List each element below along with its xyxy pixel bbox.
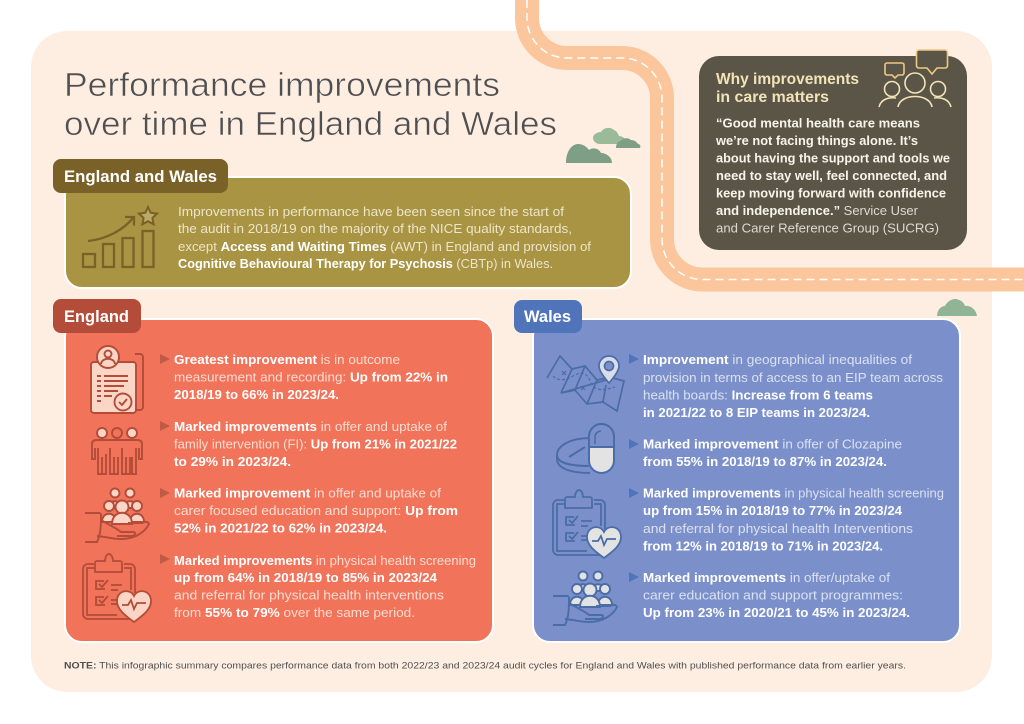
icon: map with pin bbox=[547, 356, 624, 411]
England text: outcome measurement: Greatest improvement is in outcome bbox=[174, 352, 400, 367]
England text: outcome measurement: measurement and recording: Up from 22% in bbox=[174, 370, 448, 384]
England text: carer education bbox=[174, 486, 458, 536]
tab heading: England and Wales: England and Wales bbox=[64, 167, 217, 186]
winding road bbox=[527, 0, 1024, 280]
tab heading: England bbox=[53, 299, 141, 333]
Wales text: clozapine: Marked improvement in offer of Clozapine bbox=[643, 436, 902, 452]
Wales text: physical health: and referral for physical health Interventions bbox=[643, 521, 914, 536]
Wales text: carer education: carer education and support programmes: bbox=[643, 588, 903, 602]
England text: family intervention bbox=[174, 419, 457, 469]
icon: clipboard with heart bbox=[553, 490, 621, 558]
England text: family intervention: Marked improvements in offer and uptake of bbox=[174, 419, 447, 434]
icon: hand holding people bbox=[553, 572, 617, 625]
panel: why improvements matter bbox=[699, 50, 967, 250]
England text: physical health: and referral for physical health interventions bbox=[174, 588, 445, 602]
Wales text: clozapine: from 55% in 2018/19 to 87% in 2023/24. bbox=[643, 454, 887, 469]
icon: clouds near title bbox=[566, 128, 640, 163]
title: Performance improvements bbox=[64, 66, 500, 103]
quote text bbox=[715, 116, 950, 236]
Wales bullet arrows bbox=[629, 354, 639, 582]
icon: cloud above Wales panel bbox=[937, 299, 977, 316]
England text: carer education: carer focused education and support: Up from bbox=[174, 503, 458, 518]
Wales text: geographical inequalities: health boards: Increase from 6 teams bbox=[643, 388, 873, 402]
Wales text: carer education: Up from 23% in 2020/21 to 45% in 2023/24. bbox=[643, 605, 910, 620]
England text: family intervention: to 29% in 2023/24. bbox=[174, 454, 291, 469]
Wales text: carer education bbox=[643, 570, 910, 620]
England text: carer education: Marked improvement in offer and uptake of bbox=[174, 486, 441, 500]
quote text: and independence.” Service User bbox=[716, 203, 919, 218]
heading: why improvements: in care matters bbox=[716, 89, 829, 106]
icon: clozapine tablet and capsule bbox=[557, 424, 614, 473]
icon: clipboard with heart bbox=[83, 554, 151, 622]
Wales text: physical health: Marked improvements in physical health screening bbox=[643, 486, 944, 500]
quote text: keep moving forward with confidence bbox=[716, 186, 946, 200]
Wales text: geographical inequalities: provision in terms of access to an EIP team across bbox=[643, 370, 944, 385]
Wales text: physical health: up from 15% in 2018/19 to 77% in 2023/24 bbox=[643, 503, 903, 518]
tab heading: England and Wales bbox=[53, 159, 228, 193]
summary text: Improvements in performance have been seen since the start of bbox=[178, 204, 564, 219]
summary text: the audit in 2018/19 on the majority of the NICE quality standards, bbox=[178, 221, 572, 236]
summary text: except Access and Waiting Times (AWT) in England and provision of bbox=[178, 239, 591, 254]
Wales text: carer education: Marked improvements in offer/uptake of bbox=[643, 570, 890, 585]
England text: physical health: from 55% to 79% over the same period. bbox=[174, 605, 415, 620]
summary text bbox=[178, 204, 591, 271]
England text: physical health: up from 64% in 2018/19 to 85% in 2023/24 bbox=[174, 570, 438, 585]
quote text: “Good mental health care means bbox=[716, 116, 920, 130]
title: over time in England and Wales bbox=[64, 105, 557, 142]
Wales text: geographical inequalities: in 2021/22 to 8 EIP teams in 2023/24. bbox=[643, 405, 870, 420]
England text: family intervention: family intervention (FI): Up from 21% in 2021/22 bbox=[174, 436, 457, 452]
England bullet arrows bbox=[160, 354, 170, 564]
England text: outcome measurement: 2018/19 to 66% in 2023/24. bbox=[174, 387, 339, 402]
quote text: need to stay well, feel connected, and bbox=[716, 168, 947, 183]
panel: England bbox=[53, 299, 493, 642]
heading: why improvements: Why improvements bbox=[716, 71, 859, 88]
England text: carer education: 52% in 2021/22 to 62% in 2023/24. bbox=[174, 520, 387, 536]
icon: family group bbox=[92, 428, 142, 474]
icon: patient record bbox=[91, 346, 143, 413]
England text: outcome measurement bbox=[174, 352, 448, 402]
quote text: and Carer Reference Group (SUCRG) bbox=[716, 220, 939, 236]
Wales text: physical health bbox=[643, 486, 944, 554]
tab heading: Wales bbox=[514, 300, 582, 333]
panel: England and Wales bbox=[53, 159, 631, 288]
Wales text: geographical inequalities bbox=[643, 352, 944, 420]
tab heading: England: England bbox=[64, 307, 129, 326]
icon: rising bar chart with star bbox=[83, 207, 157, 267]
England text: physical health bbox=[174, 553, 476, 620]
heading: why improvements bbox=[716, 71, 859, 106]
Wales text: clozapine bbox=[643, 436, 902, 469]
icon: hand holding people bbox=[85, 488, 149, 542]
panel: Wales bbox=[514, 300, 960, 642]
Wales text: physical health: from 12% in 2018/19 to 71% in 2023/24. bbox=[643, 538, 883, 554]
quote text: about having the support and tools we bbox=[716, 150, 950, 166]
tab heading: Wales: Wales bbox=[524, 307, 571, 326]
title bbox=[64, 66, 557, 142]
England text: physical health: Marked improvements in physical health screening bbox=[174, 553, 476, 568]
icon: group with speech bubbles bbox=[879, 50, 951, 107]
quote text: we’re not facing things alone. It’s bbox=[715, 133, 918, 148]
summary text: Cognitive Behavioural Therapy for Psychosis (CBTp) in Wales. bbox=[178, 256, 553, 271]
note: NOTE: This infographic summary compares performance data from both 2022/23 and 2023/24 audit cycles for England and Wales with published performance data from earlier years. bbox=[64, 660, 906, 672]
Wales text: geographical inequalities: Improvement in geographical inequalities of bbox=[643, 352, 912, 367]
